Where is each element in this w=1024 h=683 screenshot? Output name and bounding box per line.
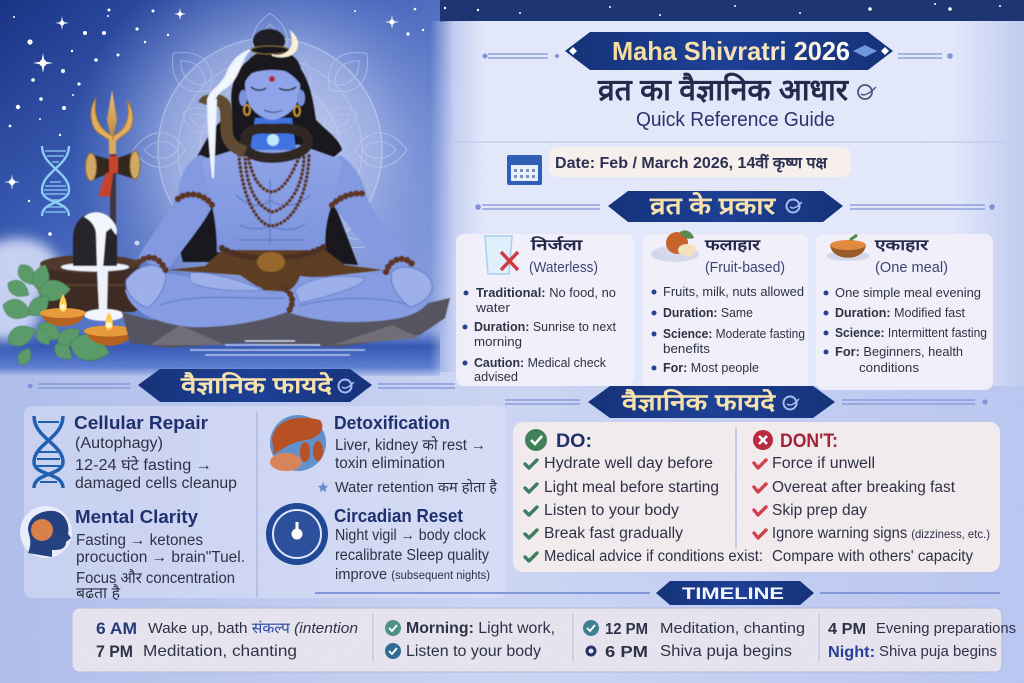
column: noon: 6 PM (605, 644, 648, 661)
icon: DNA helix (34, 416, 63, 488)
do column: Medical advice if conditions exist: (544, 548, 763, 565)
panel: one meal fast: एकाहार (874, 237, 929, 254)
panel: fruit fast: benefits (663, 341, 710, 356)
panel: scientific benefits: (Autophagy) (75, 435, 163, 452)
do column: Hydrate well day before (544, 455, 713, 472)
panel: scientific benefits: Cellular Repair (74, 413, 208, 433)
ganga stream (208, 50, 250, 178)
panel: one meal fast: conditions (859, 360, 919, 375)
divider under title (455, 141, 1005, 143)
date pill (549, 147, 851, 177)
icon: calendar (507, 155, 542, 185)
torso (202, 145, 342, 252)
water ripples (190, 341, 365, 355)
column: evening: Shiva puja begins (879, 644, 997, 660)
necklaces (239, 155, 309, 226)
column: evening: 4 PM (828, 621, 866, 638)
panel: fruit fast: (Fruit-based) (705, 259, 785, 276)
section banner: benefits right (505, 386, 988, 418)
guide label: Quick Reference Guide (636, 109, 835, 131)
date pill: Date: Feb / March 2026, 14वीं कृष्ण पक्ष (555, 153, 828, 173)
illustration: meditating Shiva (122, 29, 450, 355)
panel: scientific benefits: Water retention कम होता है (335, 479, 497, 496)
hands (126, 265, 166, 308)
subtitle: व्रत का वैज्ञानिक आधार (597, 72, 850, 107)
don't column: Ignore warning signs (dizziness, etc.) (772, 525, 990, 542)
panel: one meal fast: For: Beginners, health (835, 344, 963, 359)
icon: liver and kidneys (270, 415, 326, 471)
cloth (168, 250, 383, 292)
rocks (122, 298, 450, 348)
panel: waterless fast: निर्जला (530, 236, 584, 254)
don't column: Force if unwell (772, 455, 875, 472)
icon: circadian clock (266, 503, 328, 565)
icon: brain in head (20, 506, 72, 558)
column: evening: Evening preparations (876, 620, 1016, 637)
column: morning start: Meditation, chanting (143, 643, 297, 660)
icon: fruit and nuts (651, 230, 699, 262)
legs (125, 274, 432, 327)
timeline banner (315, 581, 1000, 605)
icon: shiva lingam with milk (40, 212, 140, 321)
do column: Light meal before starting (544, 479, 719, 496)
panel: scientific benefits: 12-24 घंटे fasting → (75, 456, 212, 474)
panel: scientific benefits (20, 406, 506, 602)
panel: scientific benefits: improve (subsequent nights) (335, 566, 490, 583)
face (245, 70, 300, 120)
column: morning start: 6 AM (96, 619, 137, 638)
main title banner: Maha Shivratri 2026 (612, 36, 850, 66)
icon: DNA in sky (42, 146, 69, 216)
panel: one meal fast: (One meal) (875, 259, 948, 276)
column: day (385, 620, 555, 660)
section banner: fast types (475, 191, 995, 222)
icon: leaves (0, 260, 113, 368)
icon: glass with red cross (485, 236, 518, 274)
panel: waterless fast (456, 234, 634, 386)
panel: scientific benefits: Detoxification (334, 413, 450, 433)
panel: waterless fast: Duration: Sunrise to next (474, 319, 616, 334)
panel: fruit fast: Duration: Same (663, 305, 753, 320)
column: morning start: Wake up, bath संकल्प (intention (148, 620, 358, 637)
panel: scientific benefits: toxin elimination (335, 455, 445, 472)
section banner: benefits right: वैज्ञानिक फायदे (621, 388, 776, 415)
panel: scientific benefits: Liver, kidney को rest → (335, 436, 486, 454)
icon: trident and damaru (86, 90, 140, 230)
panel: fruit fast: फलाहार (704, 237, 761, 254)
panel: one meal fast: Duration: Modified fast (835, 305, 965, 320)
panel: waterless fast: morning (474, 334, 522, 349)
panel: scientific benefits: Circadian Reset (334, 506, 463, 526)
column: day: Listen to your body (406, 643, 541, 660)
clouds (0, 238, 60, 340)
arms (138, 155, 225, 272)
hair behind (170, 52, 358, 265)
hair top and bun (243, 50, 301, 84)
column: noon: Meditation, chanting (660, 620, 805, 637)
panel: scientific benefits: बढता है (76, 584, 121, 602)
icon: food bowl (826, 235, 870, 261)
panel: fruit fast (643, 230, 808, 390)
panel: fruit fast: Science: Moderate fasting (663, 326, 805, 341)
panel: fruit fast: For: Most people (663, 360, 759, 375)
panel: waterless fast: (Waterless) (529, 259, 598, 276)
mandala halo (133, 13, 407, 262)
panel: waterless fast: Traditional: No food, no (476, 285, 616, 300)
do column: Listen to your body (544, 502, 679, 519)
do column: Break fast gradually (544, 525, 683, 542)
panel: one meal fast: One simple meal evening (835, 285, 981, 300)
panel: scientific benefits: Night vigil → body clock (335, 527, 486, 544)
icon: star bullet (318, 482, 328, 492)
panel: scientific benefits: Fasting → ketones (76, 532, 203, 549)
section banner: fast types: व्रत के प्रकार (649, 192, 776, 220)
crescent moon (272, 32, 297, 57)
bead bracelets (139, 193, 412, 312)
column: morning start (96, 619, 358, 661)
column: noon: Shiva puja begins (660, 643, 792, 660)
icon: oil lamps (40, 294, 134, 346)
don't column: Overeat after breaking fast (772, 479, 956, 496)
panel: timeline (72, 608, 1016, 672)
panel: scientific benefits: Mental Clarity (75, 507, 198, 527)
panel: scientific benefits: procuction → brain"Tuel. (76, 549, 245, 566)
panel: scientific benefits: damaged cells cleanup (75, 475, 237, 492)
panel: do and don't (513, 422, 1000, 572)
don't column: Skip prep day (772, 502, 867, 519)
column: noon: 12 PM (605, 621, 648, 638)
don't column: Compare with others' capacity (772, 548, 973, 565)
panel: waterless fast: water (475, 300, 511, 315)
column: evening: Night: (828, 644, 875, 661)
panel: waterless fast: Caution: Medical check (474, 355, 607, 370)
do column (525, 429, 763, 565)
throat (250, 118, 296, 150)
column: evening (828, 620, 1016, 661)
icon: swirl (858, 85, 876, 99)
snake (245, 128, 308, 158)
panel: scientific benefits: Focus और concentration (76, 569, 235, 587)
do column: DO: (556, 431, 592, 452)
timeline banner: TIMELINE (682, 584, 784, 603)
panel: one meal fast: Science: Intermittent fasting (835, 325, 987, 340)
panel: one meal fast (816, 234, 993, 390)
column: day: Morning: Light work, (406, 620, 555, 637)
don't column (753, 430, 990, 565)
panel: waterless fast: advised (474, 369, 518, 384)
illustration: starry sky (4, 3, 1001, 245)
main title banner (482, 32, 953, 70)
panel: fruit fast: Fruits, milk, nuts allowed (663, 284, 804, 299)
section banner: benefits left (28, 369, 455, 402)
column: noon (583, 620, 805, 661)
belt (222, 246, 325, 258)
panel: scientific benefits: recalibrate Sleep quality (335, 547, 489, 564)
column: morning start: 7 PM (96, 642, 133, 661)
section banner: benefits left: वैज्ञानिक फायदे (180, 371, 333, 398)
don't column: DON'T: (780, 431, 838, 452)
